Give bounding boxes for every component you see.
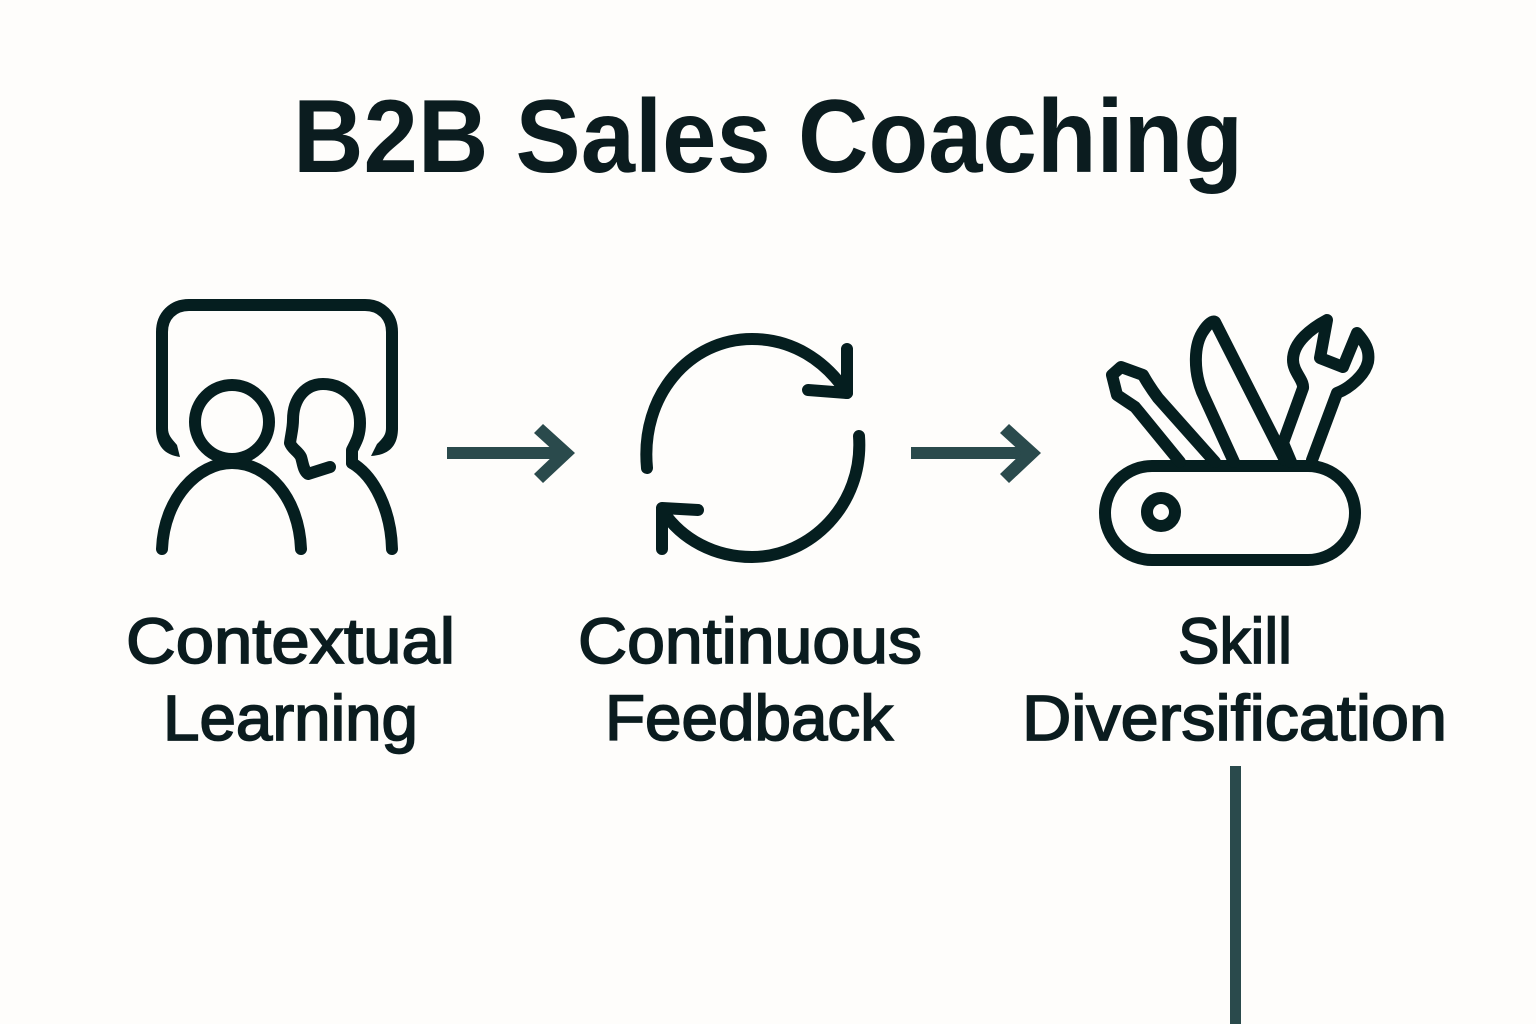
- label: skill diversification: Diversification: [1022, 682, 1447, 754]
- label: continuous feedback: Continuous: [578, 605, 922, 677]
- label: skill diversification: [1022, 605, 1447, 754]
- arrow: continuous feedback to skill diversification: [911, 424, 1041, 483]
- label: contextual learning: Contextual: [126, 605, 455, 677]
- label: continuous feedback: Feedback: [605, 682, 894, 754]
- title: B2B Sales Coaching: [293, 79, 1243, 195]
- vertical connector line: [1230, 766, 1241, 1024]
- icon: circular feedback arrows: [646, 339, 859, 557]
- label: contextual learning: [126, 605, 455, 754]
- icon: multi-tool: [1105, 320, 1368, 560]
- label: continuous feedback: [578, 605, 922, 754]
- arrow: contextual learning to continuous feedback: [447, 424, 575, 483]
- icon: two people in front of a screen: [156, 305, 398, 549]
- label: skill diversification: Skill: [1178, 605, 1292, 677]
- label: contextual learning: Learning: [163, 682, 418, 754]
